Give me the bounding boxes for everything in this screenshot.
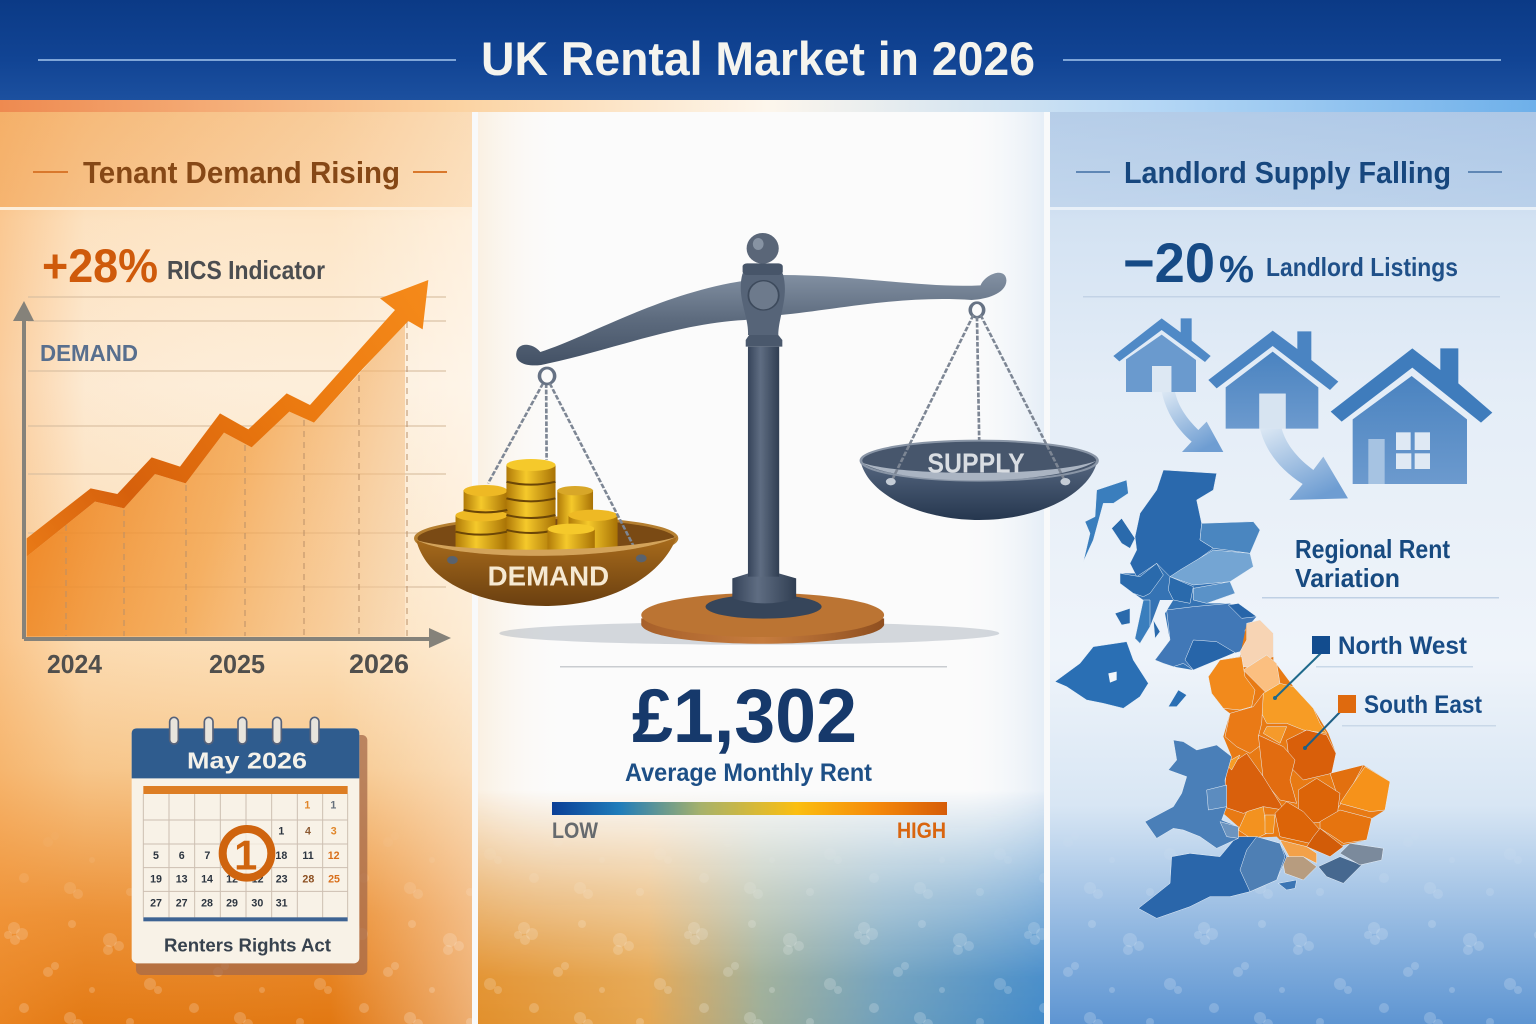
rising arrow	[27, 280, 428, 557]
calendar: May 2026: 28	[302, 874, 314, 886]
falling arrow 1	[1162, 392, 1223, 452]
house large	[1331, 348, 1492, 484]
North West callout	[1273, 632, 1473, 700]
calendar: May 2026: 14	[201, 874, 213, 886]
house small	[1113, 318, 1211, 392]
demand line chart	[13, 280, 451, 679]
Northern Ireland	[1055, 642, 1148, 708]
coin stacks	[456, 459, 618, 552]
demand line chart: 2024	[47, 649, 103, 679]
Wales	[1145, 740, 1238, 848]
calendar: May 2026: 29	[226, 898, 238, 910]
average rent block	[552, 666, 947, 843]
calendar: May 2026: 23	[276, 874, 288, 886]
average rent block: Average Monthly Rent	[625, 759, 873, 787]
chains left back	[488, 383, 547, 483]
rent gradient bar	[552, 802, 947, 815]
regional rent variation legend: Variation	[1295, 563, 1400, 593]
stat: +28% RICS indicator: +28%	[42, 239, 158, 292]
calendar: May 2026: 18	[275, 850, 287, 862]
calendar: May 2026: 11	[302, 850, 314, 862]
demand pan and coins	[416, 383, 677, 606]
calendar: May 2026: 19	[150, 874, 162, 886]
stat: -20% landlord listings	[1083, 231, 1500, 298]
calendar: May 2026: 12	[226, 874, 238, 886]
Scotland	[1083, 470, 1260, 670]
demand line chart: DEMAND	[40, 340, 138, 366]
stat: +28% RICS indicator	[42, 239, 325, 292]
calendar: May 2026: 6	[179, 850, 185, 862]
supply pan	[861, 315, 1098, 520]
stand	[706, 333, 822, 619]
hub and finial	[741, 233, 785, 335]
UK regional map	[1055, 470, 1390, 918]
circled date: 1	[234, 831, 257, 878]
rings	[539, 303, 984, 384]
header bar	[0, 0, 1536, 112]
England north and midlands	[1208, 620, 1390, 863]
South East callout: South East	[1364, 691, 1483, 719]
panel: tenant demand background	[0, 112, 472, 1024]
demand line chart: 2026	[349, 649, 409, 679]
calendar: May 2026: 25	[328, 874, 340, 886]
ground shadow	[499, 622, 999, 645]
heading: landlord supply: Landlord Supply Falling	[1124, 155, 1451, 190]
stat: -20% landlord listings: −20	[1123, 231, 1215, 294]
regional rent variation legend	[1262, 534, 1499, 750]
South East callout	[1303, 691, 1496, 750]
stat: -20% landlord listings: %	[1219, 249, 1254, 291]
panel: landlord supply background	[1050, 112, 1536, 1024]
houses with falling arrows	[1113, 318, 1492, 500]
beam	[516, 273, 1006, 365]
demand pan and coins: DEMAND	[488, 561, 609, 592]
calendar: May 2026: 12	[328, 850, 340, 862]
calendar: May 2026: 31	[276, 898, 288, 910]
calendar: May 2026: 1	[330, 800, 336, 812]
calendar: May 2026	[132, 717, 367, 975]
circled date	[223, 829, 271, 878]
falling arrow 2	[1260, 429, 1348, 500]
North West callout: North West	[1338, 632, 1468, 660]
calendar: May 2026: 28	[201, 898, 213, 910]
chart area fill	[27, 323, 405, 637]
panel: balance background	[478, 112, 1044, 1024]
average rent block: HIGH	[897, 818, 946, 843]
house medium	[1208, 331, 1338, 429]
Isle of Man	[1168, 690, 1187, 707]
calendar: May 2026: 27	[150, 898, 162, 910]
calendar: May 2026: 27	[176, 898, 188, 910]
calendar: May 2026: 1	[304, 800, 310, 812]
axes	[24, 320, 432, 639]
southern England	[1138, 837, 1383, 918]
average rent block: £1,302	[632, 674, 857, 759]
calendar: May 2026: 7	[204, 850, 210, 862]
calendar: May 2026: 5	[153, 850, 159, 862]
demand line chart: 2025	[209, 649, 265, 679]
average rent block: LOW	[552, 818, 598, 843]
stat: +28% RICS indicator: RICS Indicator	[167, 255, 325, 285]
supply pan: SUPPLY	[927, 448, 1025, 479]
calendar: May 2026: 3	[331, 826, 337, 838]
calendar: May 2026: Renters Rights Act	[164, 935, 331, 956]
calendar: May 2026: 12	[252, 874, 264, 886]
balance scale	[416, 233, 1098, 645]
stat: -20% landlord listings: Landlord Listings	[1266, 252, 1458, 282]
wooden base	[641, 593, 884, 644]
calendar: May 2026: 13	[176, 874, 188, 886]
regional rent variation legend: Regional Rent	[1295, 534, 1450, 564]
heading: tenant demand: Tenant Demand Rising	[83, 155, 400, 190]
calendar: May 2026: 4	[305, 826, 311, 838]
calendar: May 2026: 1	[278, 826, 284, 838]
calendar: May 2026: May 2026	[187, 747, 307, 773]
title: UK Rental Market in 2026	[481, 32, 1035, 85]
calendar: May 2026: 30	[251, 898, 263, 910]
